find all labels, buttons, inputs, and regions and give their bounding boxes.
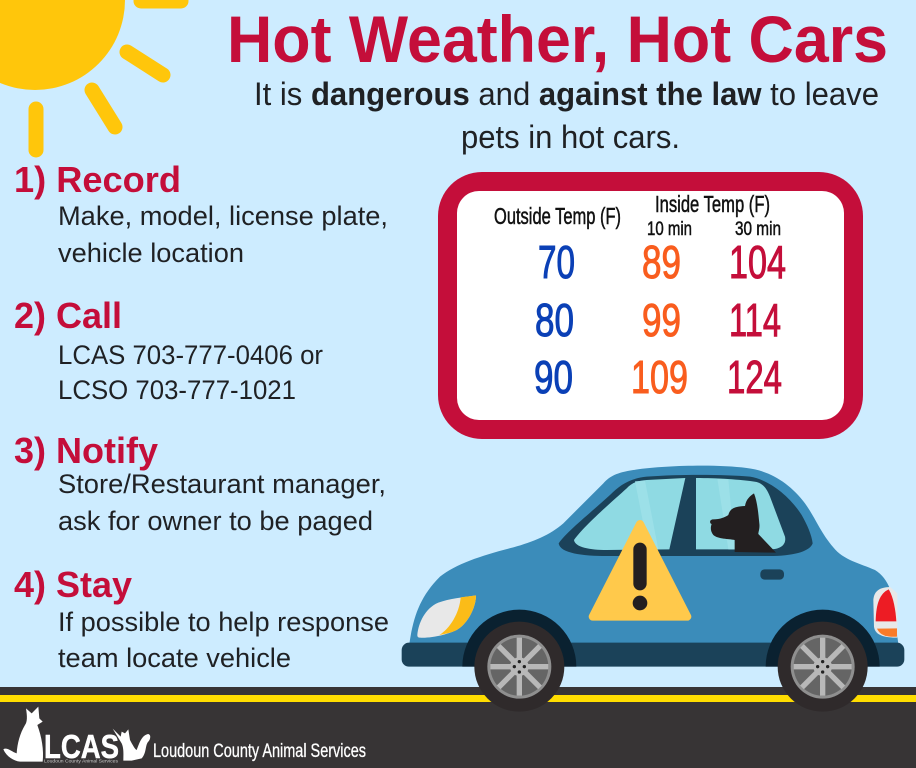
window frame xyxy=(559,475,813,556)
rear wheel xyxy=(778,622,868,712)
step 2: call: 2) Call xyxy=(14,295,122,336)
logo dog silhouette xyxy=(3,707,43,762)
outside temperatures: 80 xyxy=(535,294,574,346)
headlight xyxy=(417,595,476,638)
table headers: Inside Temp (F) xyxy=(655,191,770,217)
footer label: Loudoun County Animal Services xyxy=(153,741,366,762)
outside temperatures xyxy=(534,236,575,403)
rear window glass xyxy=(696,478,785,549)
wheel arches xyxy=(462,610,880,667)
inside temperatures after 10 min: 89 xyxy=(642,236,681,288)
step 3: notify: 3) Notify xyxy=(14,430,158,471)
inside temperatures after 30 min xyxy=(727,236,786,403)
step 1: record xyxy=(14,159,388,268)
step 1: record: Make, model, license plate, xyxy=(58,201,388,231)
inside temperatures after 30 min: 124 xyxy=(727,351,782,403)
icon: dog silhouette xyxy=(710,493,776,553)
outside temperatures: 90 xyxy=(534,351,573,403)
step 1: record: 1) Record xyxy=(14,159,181,200)
step 3: notify xyxy=(14,430,386,536)
front window glass xyxy=(574,478,685,550)
table headers: 10 min xyxy=(647,219,692,240)
step 4: stay: 4) Stay xyxy=(14,564,132,605)
icon: sun xyxy=(0,0,181,150)
inside temperatures after 10 min: 109 xyxy=(631,351,688,403)
subtitle xyxy=(254,76,879,155)
logo letters: LCAS xyxy=(44,728,119,765)
road xyxy=(0,687,916,768)
table headers: 30 min xyxy=(735,219,781,240)
step 4: stay: team locate vehicle xyxy=(58,643,291,673)
front wheel xyxy=(474,622,564,712)
step 3: notify: ask for owner to be paged xyxy=(58,506,373,536)
inside temperatures after 30 min: 104 xyxy=(729,236,786,288)
inside temperatures after 10 min xyxy=(631,236,688,403)
panel: temperature table xyxy=(438,172,863,439)
table headers xyxy=(494,191,781,240)
step 3: notify: Store/Restaurant manager, xyxy=(58,469,386,499)
illustration: car with dog xyxy=(402,466,904,712)
logo: LCAS xyxy=(3,707,150,765)
title: Hot Weather, Hot Cars xyxy=(227,2,888,76)
subtitle: It is dangerous and against the law to leave xyxy=(254,76,879,112)
outside temperatures: 70 xyxy=(538,236,575,288)
sill xyxy=(402,643,904,667)
tail light xyxy=(873,587,897,638)
step 2: call: LCAS 703-777-0406 or xyxy=(58,340,323,370)
inside temperatures after 10 min: 99 xyxy=(642,294,681,346)
step 1: record: vehicle location xyxy=(58,238,244,268)
inside temperatures after 30 min: 114 xyxy=(729,294,781,346)
car body xyxy=(409,466,898,644)
icon: warning triangle xyxy=(593,524,687,617)
subtitle: pets in hot cars. xyxy=(461,119,680,155)
logo cat silhouette xyxy=(113,729,150,761)
step 2: call: LCSO 703-777-1021 xyxy=(58,375,296,405)
logo small text: Loudoun County Animal Services xyxy=(44,758,119,764)
step 4: stay: If possible to help response xyxy=(58,607,389,637)
door handle xyxy=(760,569,784,580)
table headers: Outside Temp (F) xyxy=(494,203,621,229)
step 4: stay xyxy=(14,564,389,673)
step 2: call xyxy=(14,295,323,405)
